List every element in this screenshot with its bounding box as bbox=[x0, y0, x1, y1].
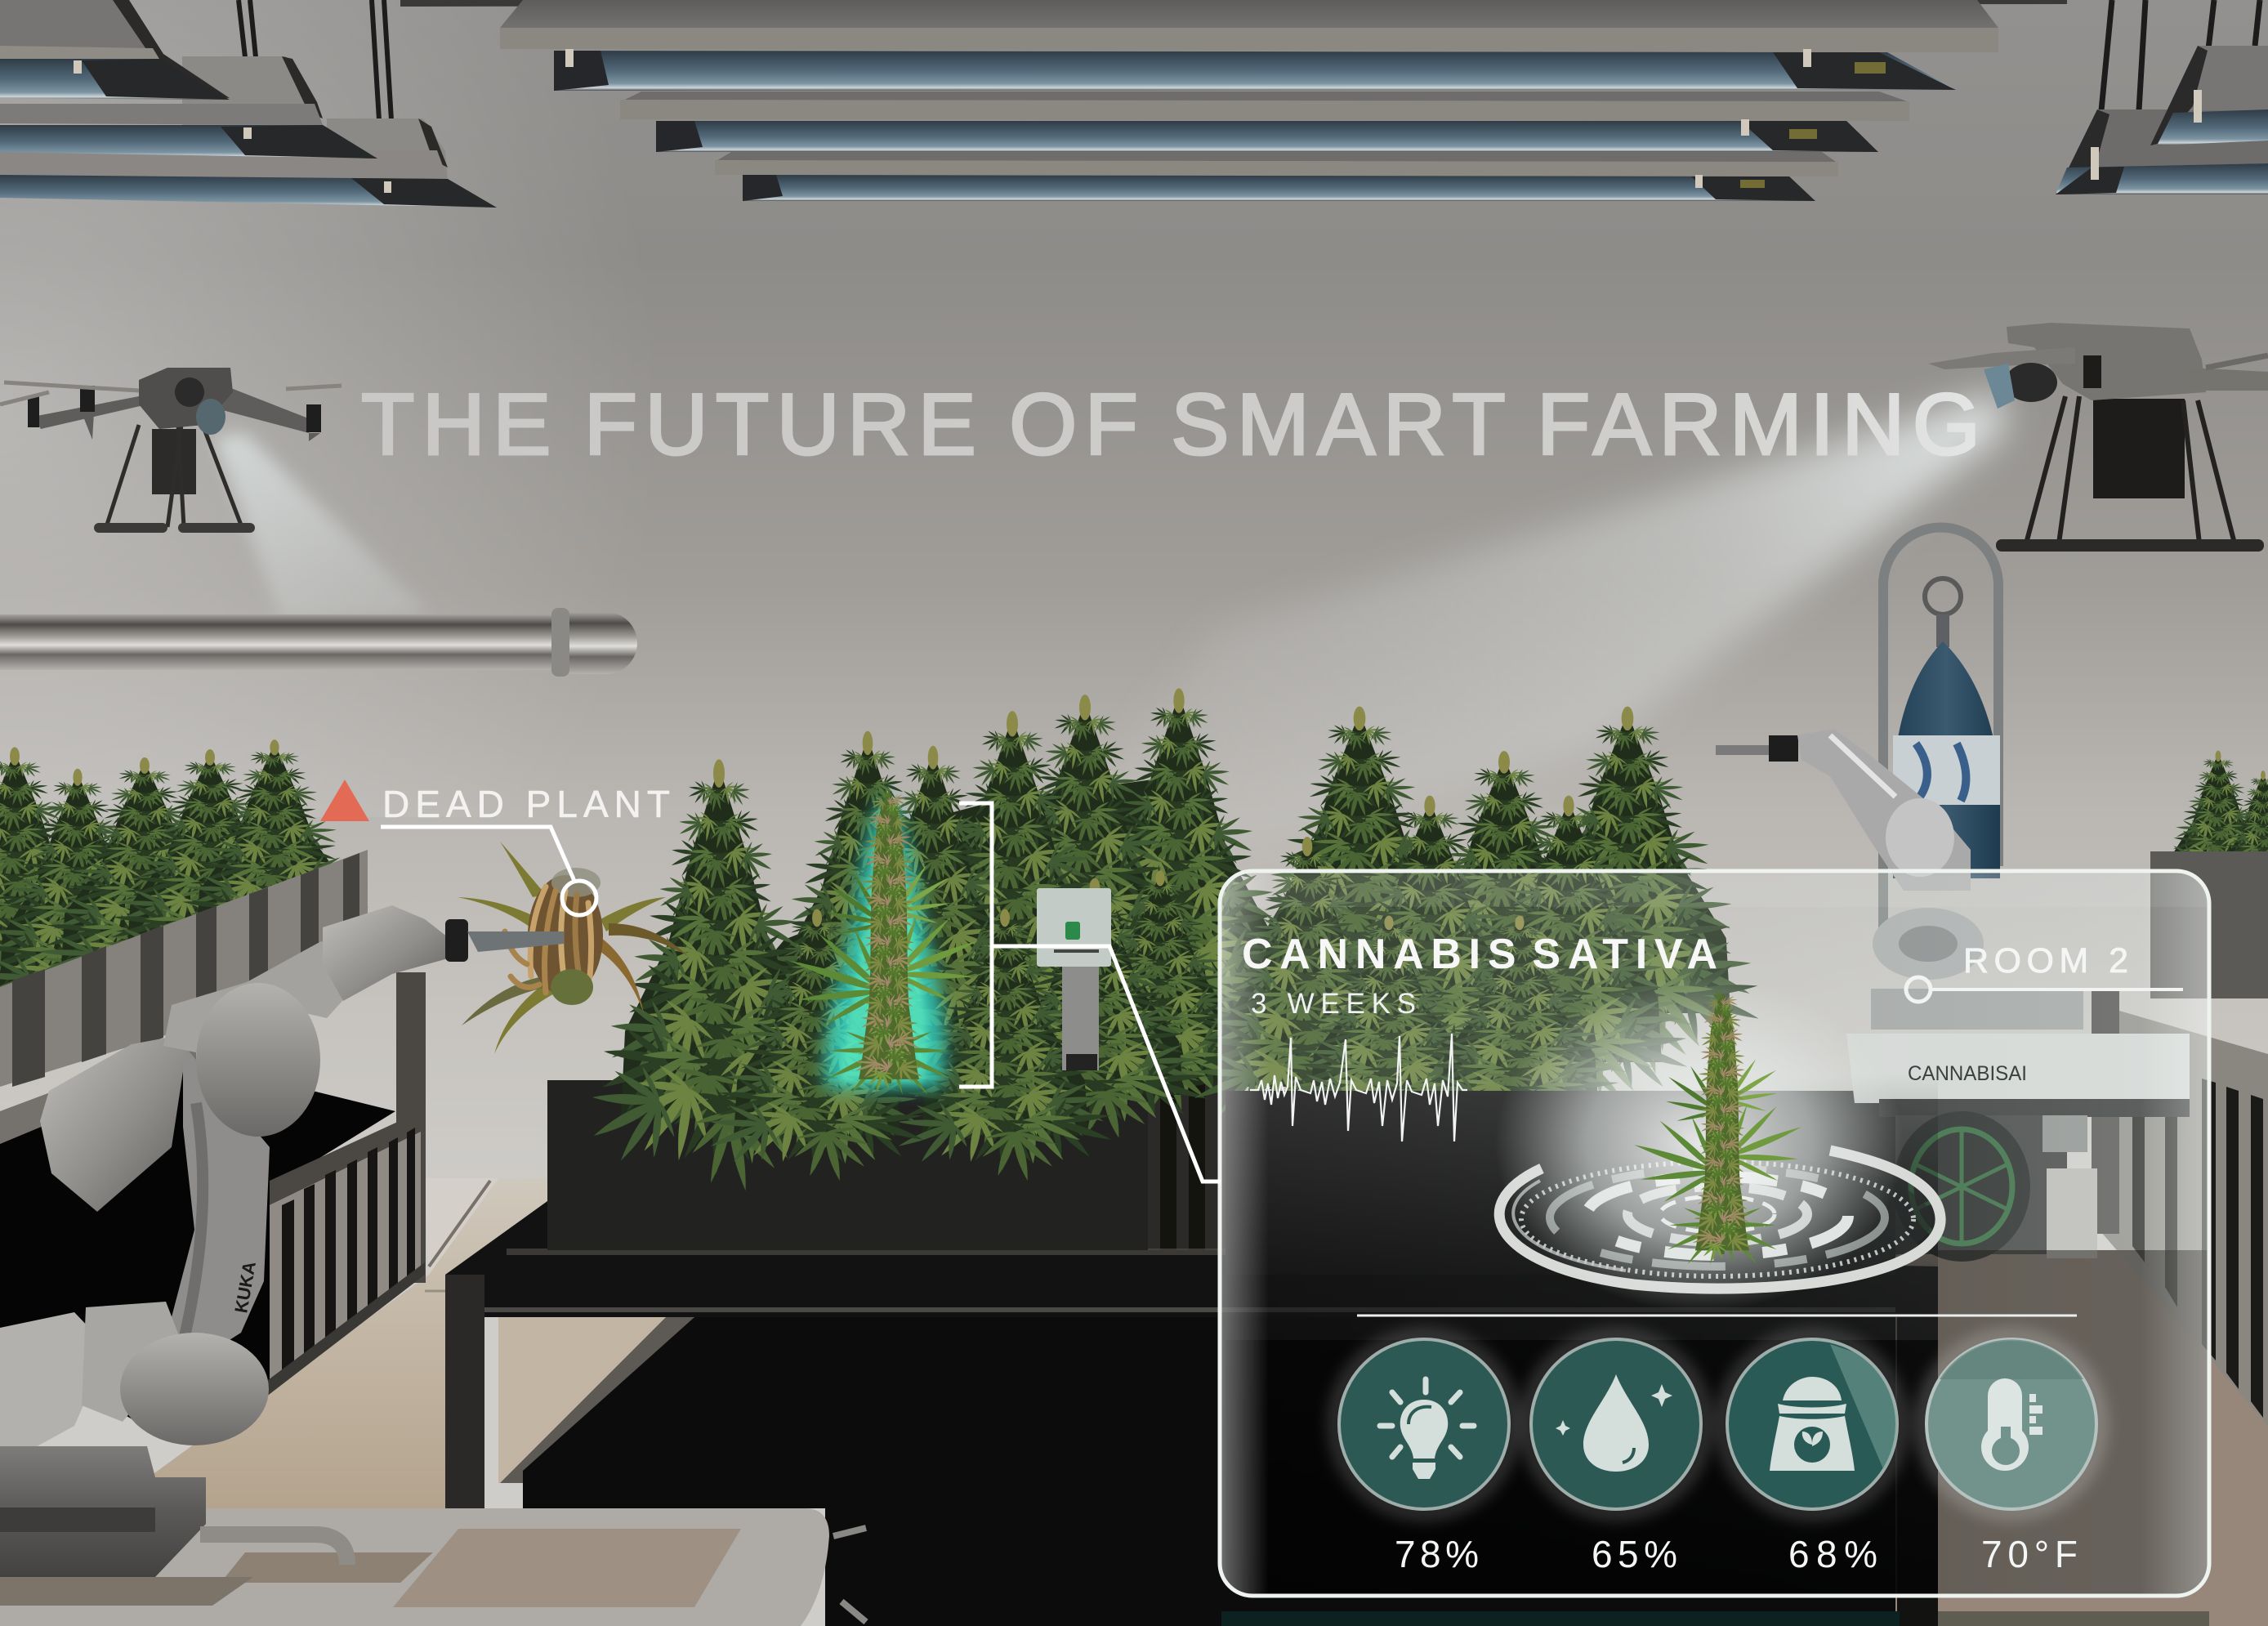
floor bbox=[106, 1178, 2268, 1626]
plants on central planter bbox=[574, 688, 1315, 1201]
plant age: 3 WEEKS bbox=[1251, 988, 1416, 1020]
icon: left drone bbox=[0, 368, 342, 533]
dark planter behind panel bbox=[1226, 1091, 1895, 1275]
right robot arm bbox=[1716, 729, 1971, 891]
icon: fertilizer sack bbox=[1770, 1377, 1855, 1471]
dead plant held by gripper bbox=[458, 842, 688, 1054]
plant name heading: CANNABIS SATIVA bbox=[1242, 931, 1717, 978]
metric: light 78%: 78% bbox=[1395, 1533, 1479, 1575]
dead plant warning label bbox=[320, 779, 670, 915]
dead plant warning label: DEAD PLANT bbox=[382, 783, 670, 825]
metric: water 65% bbox=[1528, 1336, 1704, 1575]
metric: soil nutrients 68%: 68% bbox=[1788, 1533, 1877, 1575]
scanned plant bracket connector bbox=[959, 803, 1221, 1182]
drone light beams bbox=[214, 392, 2003, 899]
metric: light 78% bbox=[1336, 1336, 1512, 1575]
sensor unit on pole bbox=[1037, 888, 1111, 1070]
title: THE FUTURE OF SMART FARMING bbox=[361, 375, 1980, 473]
robot base mounted on workbench bbox=[0, 1446, 347, 1577]
icon: light bulb bbox=[1380, 1379, 1474, 1479]
callout leader line bbox=[381, 827, 596, 915]
robot arm holding dead plant bbox=[0, 905, 468, 1467]
robot arm holding dead plant: KUKA bbox=[230, 1260, 260, 1315]
room label: ROOM 2 bbox=[1963, 941, 2128, 981]
central planter and table bbox=[445, 915, 1938, 1626]
icon: thermometer bbox=[1981, 1378, 2043, 1471]
holographic disc bbox=[1499, 1150, 1940, 1289]
plants behind left rack bbox=[0, 739, 389, 1039]
metric: soil nutrients 68% bbox=[1724, 1336, 1900, 1575]
icon: water drop bbox=[1556, 1374, 1672, 1472]
bottom-left workbench bbox=[0, 1508, 866, 1626]
metal pipe bbox=[0, 608, 637, 677]
gas cylinder with frame bbox=[1883, 527, 2000, 931]
machine behind panel: counter, motor and fan wheel bbox=[1846, 908, 2190, 1262]
plant hologram bbox=[1619, 986, 1817, 1279]
chart: heartbeat growth signal bbox=[1250, 1034, 1467, 1141]
brand label: CANNABISAI bbox=[1908, 1062, 2027, 1085]
holographic glow bbox=[1495, 976, 1904, 1311]
metric: temperature 70F bbox=[1923, 1336, 2100, 1575]
metric: temperature 70F: 70°F bbox=[1981, 1533, 2078, 1575]
dark base strip under panel bbox=[1221, 1611, 2209, 1626]
room label leader line bbox=[1906, 977, 2183, 1002]
icon: warning triangle bbox=[320, 779, 369, 821]
right ceiling grow lights bbox=[2056, 0, 2268, 194]
icon: right drone bbox=[1928, 323, 2268, 552]
left ceiling grow lights bbox=[0, 0, 497, 208]
divider bbox=[1357, 1314, 2077, 1317]
right plant cluster bbox=[1176, 707, 1777, 1144]
central ceiling grow lights bbox=[400, 0, 2067, 201]
highlighted scanned plant with cyan aura bbox=[774, 784, 995, 1111]
right side rack and plants bbox=[2092, 751, 2268, 1426]
left planter rack bbox=[0, 850, 426, 1438]
metric: water 65%: 65% bbox=[1592, 1533, 1677, 1575]
panel: plant status glass card bbox=[1220, 871, 2209, 1597]
